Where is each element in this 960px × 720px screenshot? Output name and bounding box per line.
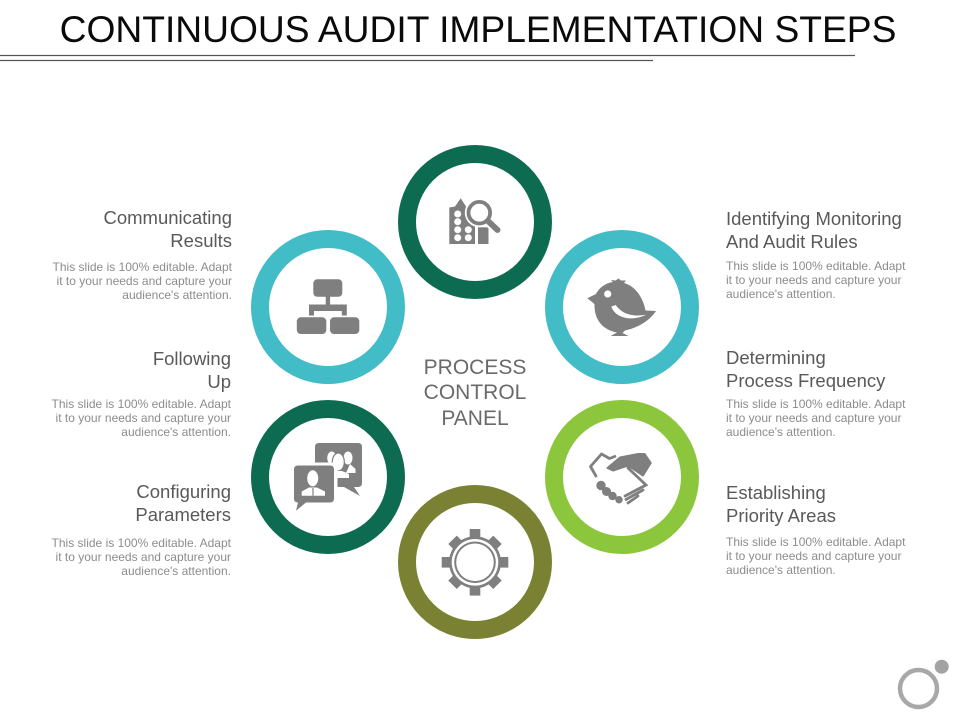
ring: upper right teal <box>554 239 690 375</box>
text block: Establishing Priority Areas: This slide is 100% editable. Adapt <box>726 535 906 549</box>
ring: top dark green <box>407 154 543 290</box>
text block: Identifying Monitoring And Audit Rules <box>726 208 906 301</box>
text block: Establishing Priority Areas: it to your needs and capture your <box>726 549 901 563</box>
icon: chat bubbles with people <box>290 443 362 511</box>
text block: Determining Process Frequency: This slide is 100% editable. Adapt <box>726 397 906 411</box>
text block: Configuring Parameters <box>52 481 232 578</box>
ring: upper left teal <box>260 239 396 375</box>
text block: Identifying Monitoring And Audit Rules: it to your needs and capture your <box>726 273 901 287</box>
text block: Identifying Monitoring And Audit Rules: This slide is 100% editable. Adapt <box>726 259 906 273</box>
ring: bottom olive <box>407 494 543 630</box>
text block: Communicating Results: audience's attention. <box>122 288 232 302</box>
text block: Determining Process Frequency: Determining <box>726 347 826 368</box>
center label: PROCESS <box>424 356 526 379</box>
center label: PANEL <box>441 407 509 430</box>
text block: Determining Process Frequency <box>726 347 906 439</box>
text block: Communicating Results: This slide is 100% editable. Adapt <box>53 260 233 274</box>
text block: Following Up: Up <box>207 371 231 392</box>
text block: Following Up: audience's attention. <box>121 425 231 439</box>
text block: Configuring Parameters: This slide is 100% editable. Adapt <box>52 536 232 550</box>
text block: Configuring Parameters: Configuring <box>136 481 231 502</box>
text block: Determining Process Frequency: audience's attention. <box>726 425 836 439</box>
text block: Communicating Results: Communicating <box>103 207 232 228</box>
text block: Configuring Parameters: it to your needs and capture your <box>56 550 231 564</box>
ring: lower right lime <box>554 409 690 545</box>
center label: CONTROL <box>424 381 526 404</box>
ring: lower left dark green <box>260 409 396 545</box>
text block: Configuring Parameters: Parameters <box>135 504 231 525</box>
icon: organization chart <box>297 279 359 334</box>
text block: Communicating Results: Results <box>170 230 232 251</box>
text block: Establishing Priority Areas: Establishing <box>726 482 826 503</box>
text block: Identifying Monitoring And Audit Rules: And Audit Rules <box>726 231 858 252</box>
icon: gear <box>442 529 508 596</box>
text block: Establishing Priority Areas: audience's attention. <box>726 563 836 577</box>
center label <box>424 356 526 430</box>
text block: Identifying Monitoring And Audit Rules: audience's attention. <box>726 287 836 301</box>
text block: Establishing Priority Areas <box>726 482 906 577</box>
text block: Identifying Monitoring And Audit Rules: Identifying Monitoring <box>726 208 902 229</box>
text block: Determining Process Frequency: it to your needs and capture your <box>726 411 901 425</box>
text block: Configuring Parameters: audience's attention. <box>121 564 231 578</box>
text block: Following Up <box>52 348 232 439</box>
icon: bird <box>587 278 656 336</box>
icon: handshake <box>590 454 651 503</box>
text block: Following Up: This slide is 100% editable. Adapt <box>52 397 232 411</box>
text block: Following Up: it to your needs and capture your <box>56 411 231 425</box>
text block: Communicating Results <box>53 207 233 302</box>
text block: Establishing Priority Areas: Priority Areas <box>726 505 836 526</box>
text block: Communicating Results: it to your needs and capture your <box>57 274 232 288</box>
text block: Determining Process Frequency: Process Frequency <box>726 370 886 391</box>
logo mark <box>900 660 949 707</box>
title: CONTINUOUS AUDIT IMPLEMENTATION STEPS <box>60 8 896 50</box>
text block: Following Up: Following <box>153 348 231 369</box>
icon: building with magnifier <box>449 198 498 244</box>
